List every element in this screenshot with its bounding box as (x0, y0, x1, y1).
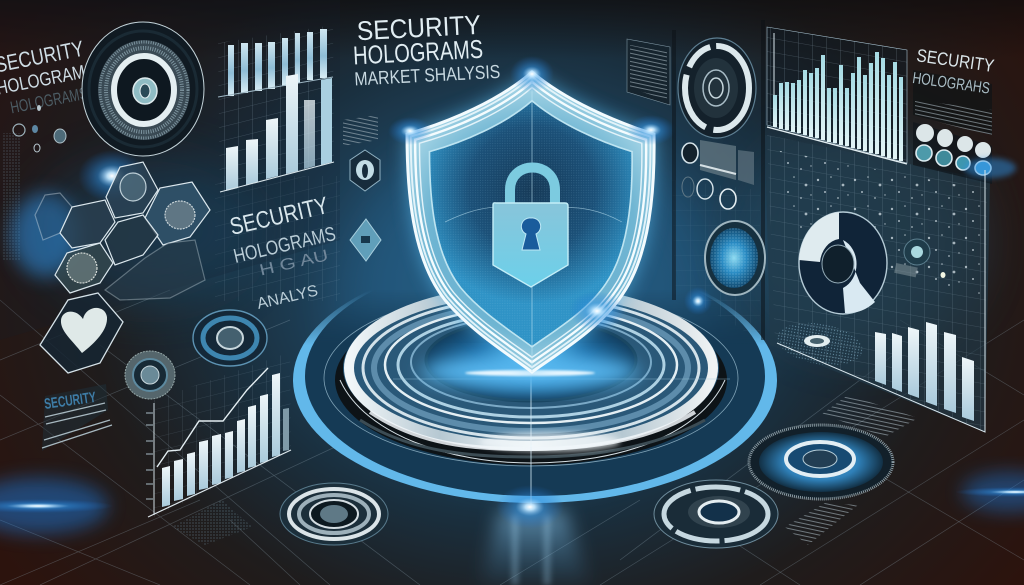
main title: SECURITY (356, 10, 482, 46)
circular hologram gauge (82, 22, 204, 156)
left heading text (0, 34, 101, 119)
floor grid (0, 290, 1024, 585)
bar chart: top right (767, 27, 907, 164)
lens flare: bottom left (0, 478, 113, 534)
middle heading text (224, 192, 349, 316)
middle heading text: H G AU (258, 247, 330, 279)
donut chart: right (799, 212, 887, 314)
left heading text: HOLOGRAMS (9, 84, 89, 117)
bar chart: lower right (777, 170, 985, 432)
middle heading text: ANALYS (255, 282, 320, 313)
main title (351, 9, 501, 90)
small panel: security text: SECURITY (43, 389, 97, 413)
icon buttons: right (913, 122, 1016, 184)
hexagon cluster (35, 162, 210, 300)
silver rings (343, 286, 719, 450)
small panel: security text (42, 384, 112, 451)
panel: right dashboard wall (672, 20, 990, 432)
middle heading text: SECURITY (227, 192, 331, 241)
right heading panel: SECURITY (915, 45, 995, 76)
disc: blue, lower right (749, 425, 893, 499)
disc: silver, bottom centre right (654, 480, 778, 548)
icon: hexagon badge (350, 150, 380, 191)
shield (388, 56, 712, 374)
lens flare: right (955, 472, 1024, 512)
hexagon icon: seal (120, 173, 146, 201)
bar chart: upper left (218, 25, 334, 192)
dark base (324, 290, 738, 466)
lens flare: hexagon cluster (11, 150, 146, 277)
right heading panel (911, 45, 995, 136)
panel: left dashboard wall (0, 0, 340, 340)
centre-left small panels (343, 115, 381, 261)
crosshair and base glow (393, 356, 730, 510)
light beam (480, 485, 590, 585)
icon: keyhole (521, 218, 541, 250)
text panel: upper right (627, 39, 670, 105)
glowing orb (705, 221, 765, 295)
data texture: lower left (172, 500, 252, 545)
middle heading text: HOLOGRAMS (232, 223, 338, 268)
main title: HOLOGRAMS (352, 34, 484, 70)
icon: heart (61, 308, 107, 353)
small node: right (894, 239, 946, 278)
main title: MARKET SHALYSIS (354, 62, 501, 90)
text lines: lower right (822, 395, 918, 437)
disc: bottom left (280, 483, 388, 545)
fingerprint ellipse (774, 317, 866, 371)
central platform (293, 294, 777, 504)
small disc: lower left (193, 310, 267, 366)
left data column (3, 105, 66, 260)
small disc: lower left 2 (125, 351, 175, 399)
icon: padlock (493, 168, 568, 287)
shield sparkles (388, 56, 712, 331)
outer blue ring (293, 294, 777, 503)
small widgets: right of shield (682, 140, 754, 209)
right heading panel: HOLOGRAHS (911, 70, 991, 98)
ring gauge: upper right (678, 38, 756, 138)
text lines: bottom right (785, 503, 858, 545)
text block (343, 115, 378, 146)
icon: diamond badge (350, 219, 381, 261)
hexagon icon: whorl (67, 253, 97, 283)
chart: rising bars and line (146, 352, 291, 517)
heart hexagon (40, 293, 123, 373)
hexagon icon: fingerprint (165, 201, 195, 229)
